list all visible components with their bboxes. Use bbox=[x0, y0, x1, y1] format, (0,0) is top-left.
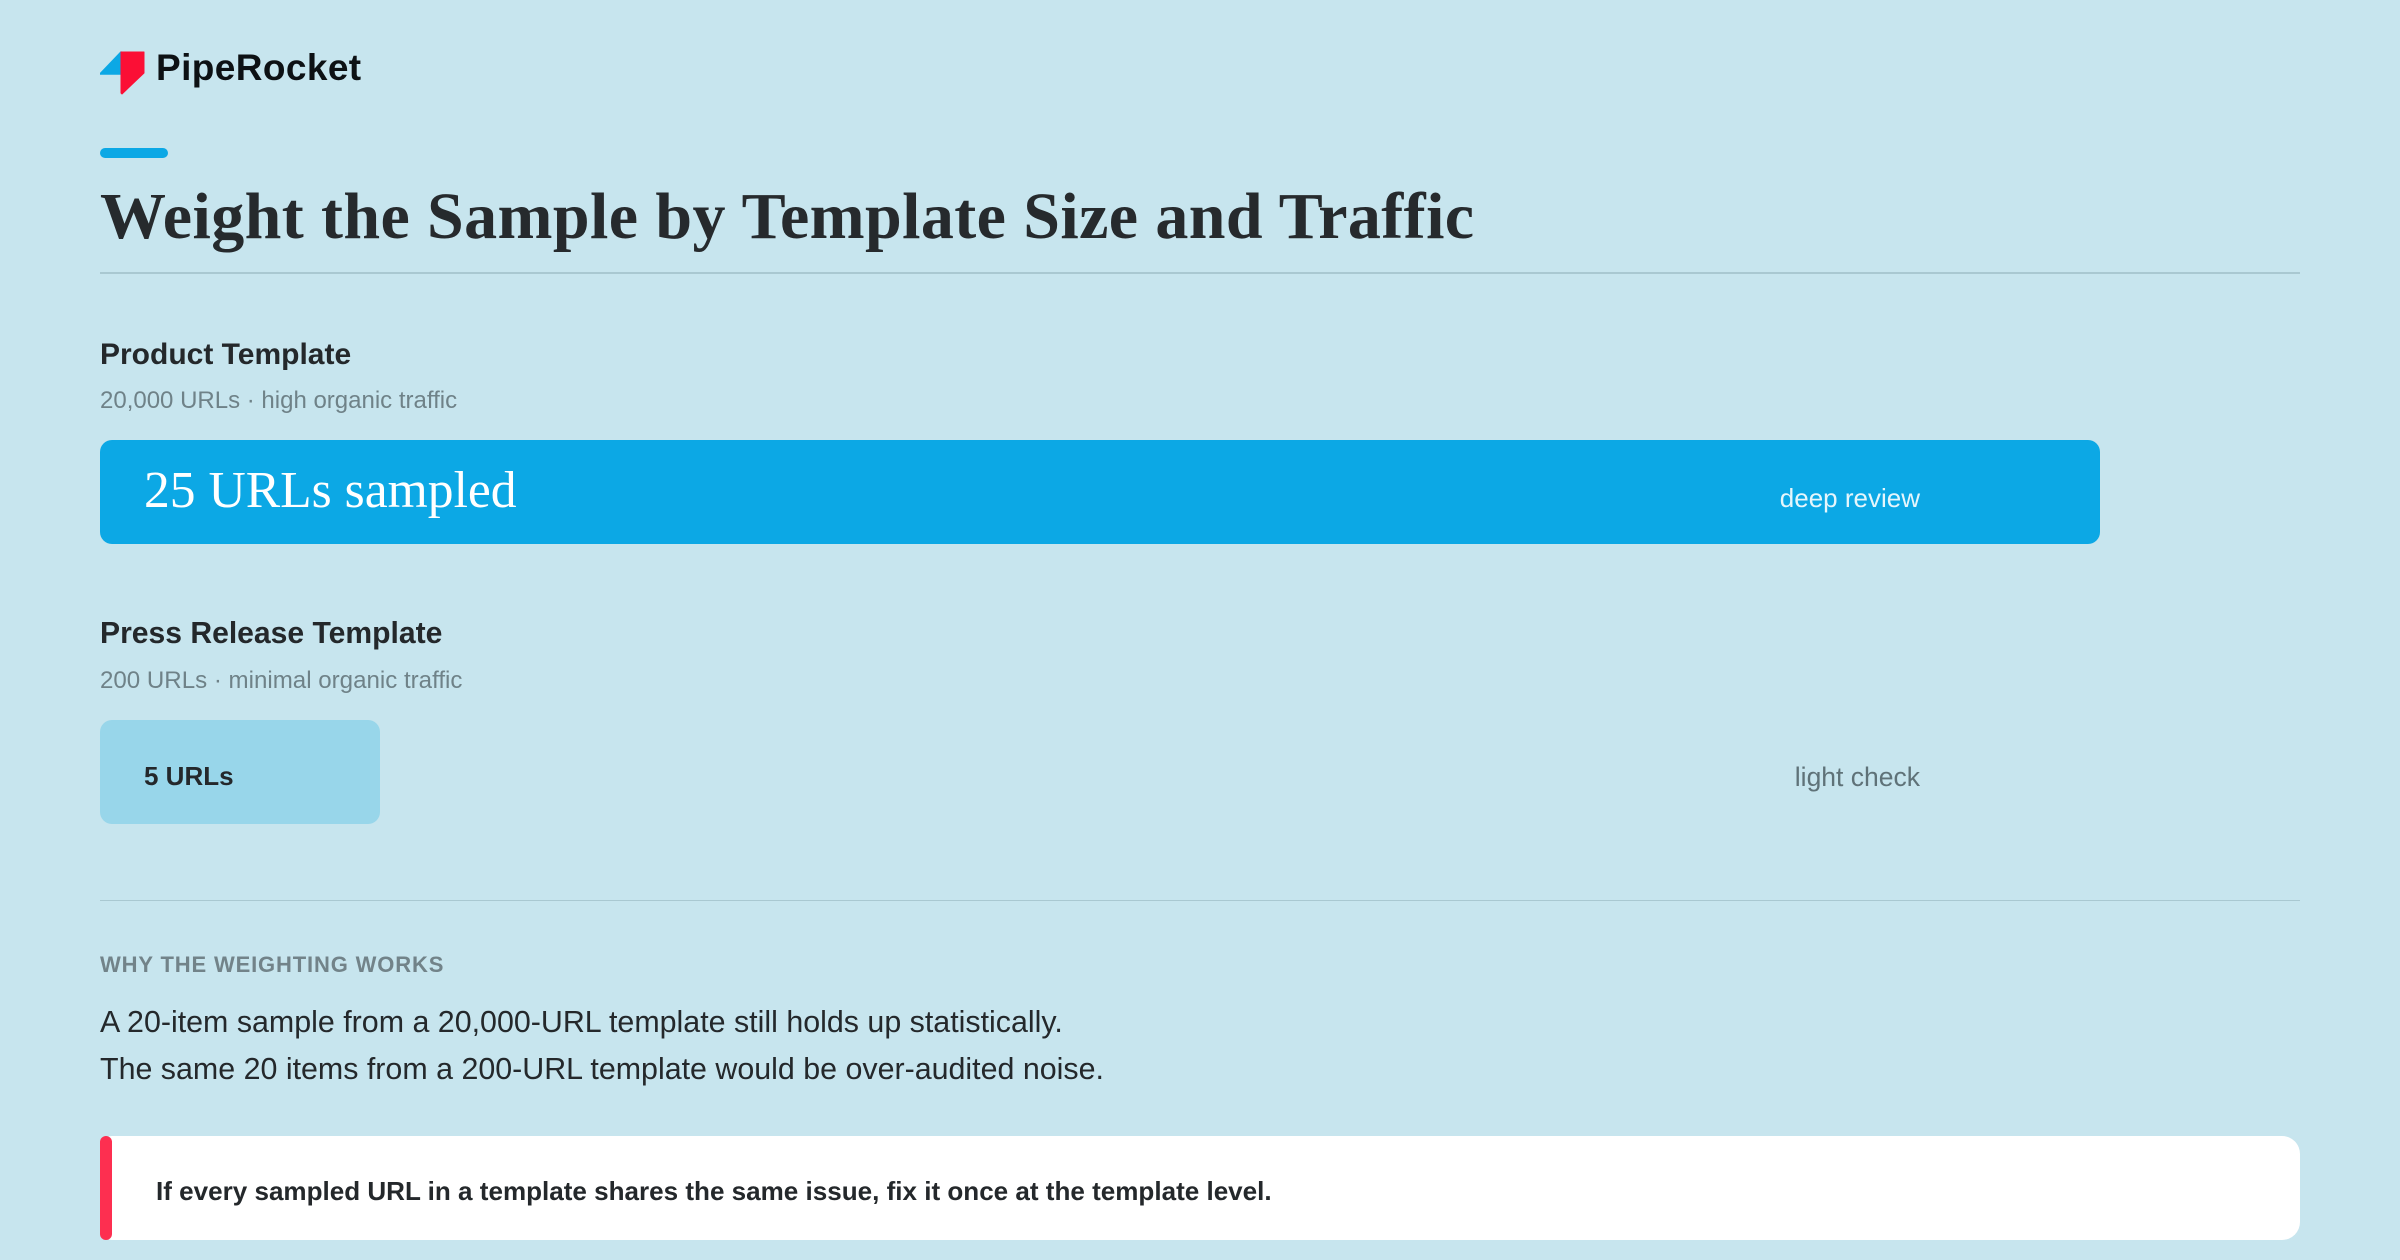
bar note: light check: light check bbox=[1795, 762, 1920, 792]
bar: 25 URLs sampled bbox=[100, 440, 2100, 544]
callout accent bbox=[100, 1136, 112, 1240]
title: Weight the Sample by Template Size and Traffic bbox=[100, 180, 1474, 252]
bar label: 5 URLs: 5 URLs bbox=[144, 761, 234, 791]
panel: product template bbox=[100, 338, 2100, 544]
bar label: 25 URLs sampled: 25 URLs sampled bbox=[144, 462, 517, 519]
heading: product template: Product Template bbox=[100, 338, 351, 370]
body text bbox=[100, 1004, 1104, 1086]
callout text: If every sampled URL in a template shares the same issue, fix it once at the template level. bbox=[156, 1176, 1272, 1206]
explanation block bbox=[100, 952, 1104, 1086]
product template details: 20,000 URLs · high organic traffic bbox=[100, 386, 457, 414]
press release template details: 200 URLs · minimal organic traffic bbox=[100, 666, 462, 694]
accent bar bbox=[100, 148, 168, 158]
wordmark: PipeRocket bbox=[156, 47, 362, 88]
panel: press release template bbox=[100, 617, 1920, 824]
bar note: deep review: deep review bbox=[1780, 483, 1920, 513]
bar: 5 URLs bbox=[100, 720, 380, 824]
body text: A 20-item sample from a 20,000-URL template still holds up statistically. bbox=[100, 1004, 1063, 1038]
logo bbox=[100, 47, 362, 94]
callout bbox=[100, 1136, 2300, 1240]
icon: rocket mark bbox=[100, 51, 144, 94]
body text: The same 20 items from a 200-URL template would be over-audited noise. bbox=[100, 1052, 1104, 1086]
eyebrow heading: WHY THE WEIGHTING WORKS bbox=[100, 952, 444, 977]
heading: press release template: Press Release Template bbox=[100, 617, 442, 650]
